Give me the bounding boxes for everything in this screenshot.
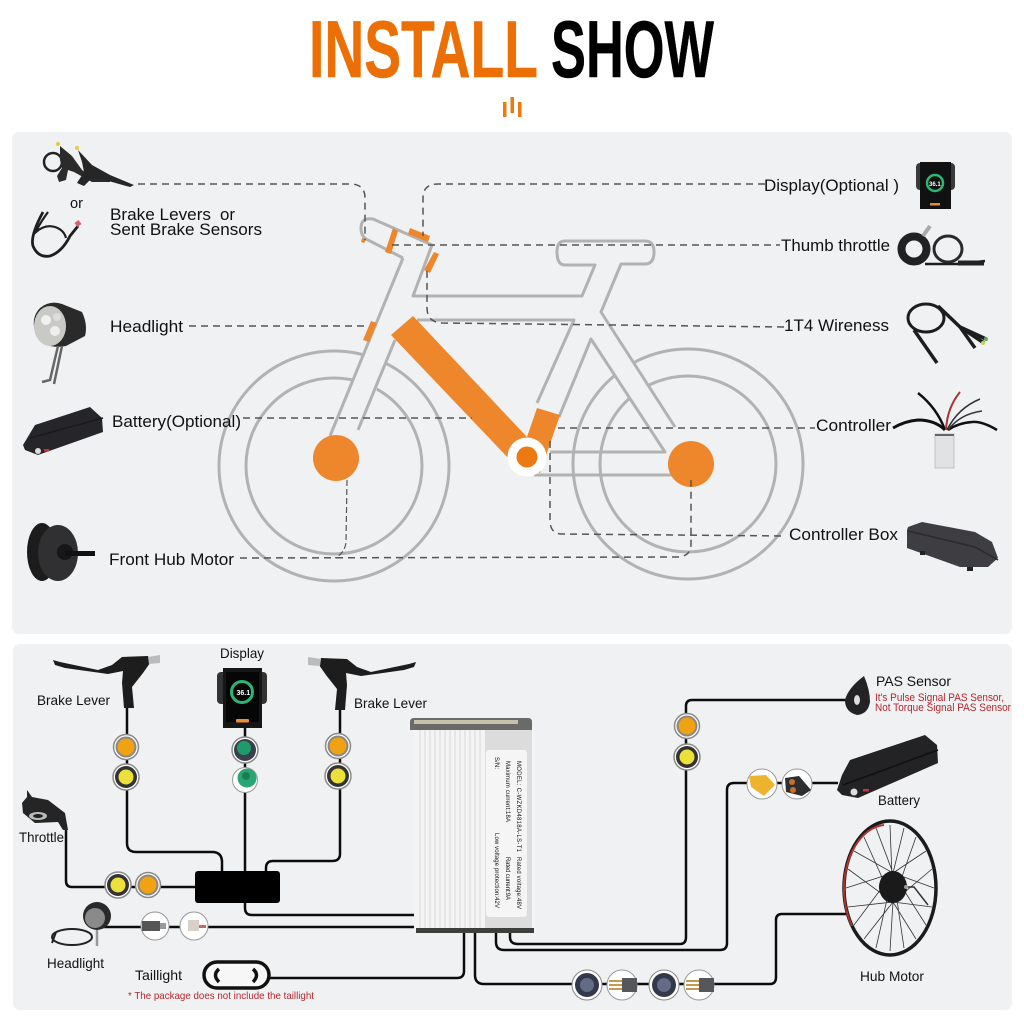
connectors: battery <box>747 769 812 799</box>
icon: left brake lever <box>53 655 160 708</box>
label: taillight: Taillight <box>135 967 182 983</box>
title: INSTALL <box>309 5 538 95</box>
controller label text: S/N: <box>493 757 499 769</box>
icon: throttle <box>22 790 68 830</box>
connectors: PAS sensor <box>674 714 700 770</box>
icon: brake sensor cable <box>32 212 80 256</box>
connectors: headlight <box>141 912 208 940</box>
note: PAS sensor type: It's Pulse Signal PAS Sensor, <box>875 692 1004 704</box>
icon: display <box>916 162 955 209</box>
icon: display: 36.1 <box>929 182 941 188</box>
controller label text: MODEL: C-WZKD4818A-LS-T1 <box>515 761 521 853</box>
label: controller box: Controller Box <box>789 525 898 544</box>
label: headlight: Headlight <box>47 955 104 971</box>
label: 1T4 wireness: 1T4 Wireness <box>784 316 889 335</box>
icon: battery <box>23 407 103 455</box>
label: left brake lever: Brake Lever <box>37 692 110 708</box>
label: right brake lever: Brake Lever <box>354 695 427 711</box>
icon: title tick marks <box>503 97 522 117</box>
icon: taillight <box>204 962 269 988</box>
connectors: motor <box>572 970 714 1000</box>
panel: wiring diagram <box>13 644 1012 1010</box>
label: brake levers or sensors: or <box>220 205 235 224</box>
icon: controller with wires <box>893 392 997 468</box>
label: brake levers or sensors <box>70 195 262 239</box>
bike frame outline <box>219 219 803 581</box>
icon: thumb throttle <box>902 226 985 264</box>
label: thumb throttle: Thumb throttle <box>781 236 890 255</box>
label: display: Display(Optional ) <box>764 176 899 195</box>
note: PAS sensor type: Not Torque Signal PAS Sensor <box>875 702 1011 714</box>
icon: right brake lever <box>308 657 416 710</box>
connectors: throttle <box>105 872 160 898</box>
icon: battery pack <box>837 735 938 798</box>
controller label text <box>493 757 521 909</box>
icon: small headlight <box>52 902 111 946</box>
dashed leader lines <box>138 184 815 558</box>
icon: display unit: 36.1 <box>236 690 250 697</box>
title: SHOW <box>551 5 714 95</box>
icon: display unit <box>217 668 267 728</box>
label: battery: Battery(Optional) <box>112 412 241 431</box>
label: brake levers or sensors: or <box>70 195 83 212</box>
icon: headlight <box>34 303 86 384</box>
icon: 1T4 wiring cable <box>908 304 988 363</box>
label: controller: Controller <box>816 416 891 435</box>
label: brake levers or sensors: Sent Brake Sensors <box>110 220 262 239</box>
controller label text: Low voltage protection:42V <box>493 833 499 908</box>
controller label text: Rated current:9A <box>504 857 510 900</box>
label: hub motor: Hub Motor <box>860 968 924 984</box>
icon: hub motor wheel <box>844 821 936 955</box>
controller <box>410 718 534 933</box>
label: display: Display <box>220 645 264 661</box>
label: headlight: Headlight <box>110 317 183 336</box>
black wires <box>66 700 846 984</box>
connectors: right brake <box>325 734 351 789</box>
controller label text: Rated voltage:48V <box>515 857 521 909</box>
label: battery: Battery <box>878 792 920 808</box>
note: PAS sensor type <box>875 692 1011 714</box>
label: brake levers or sensors: Brake Levers <box>110 205 211 224</box>
controller label text: Maximum current:18A <box>504 761 510 822</box>
label: PAS sensor: PAS Sensor <box>876 673 951 689</box>
connectors: left brake <box>113 734 139 790</box>
icon: hub motor <box>27 523 95 581</box>
icon: PAS sensor <box>845 676 870 715</box>
panel: bike installation diagram <box>12 132 1012 634</box>
junction box <box>195 871 280 903</box>
connectors: display <box>232 737 258 792</box>
label: throttle: Throttle <box>19 829 64 845</box>
icon: controller box <box>907 522 998 571</box>
icon: brake levers <box>44 142 134 187</box>
label: front hub motor: Front Hub Motor <box>109 550 234 569</box>
orange hubs and battery <box>313 228 714 487</box>
note: taillight not included: * The package does not include the taillight <box>128 990 314 1002</box>
